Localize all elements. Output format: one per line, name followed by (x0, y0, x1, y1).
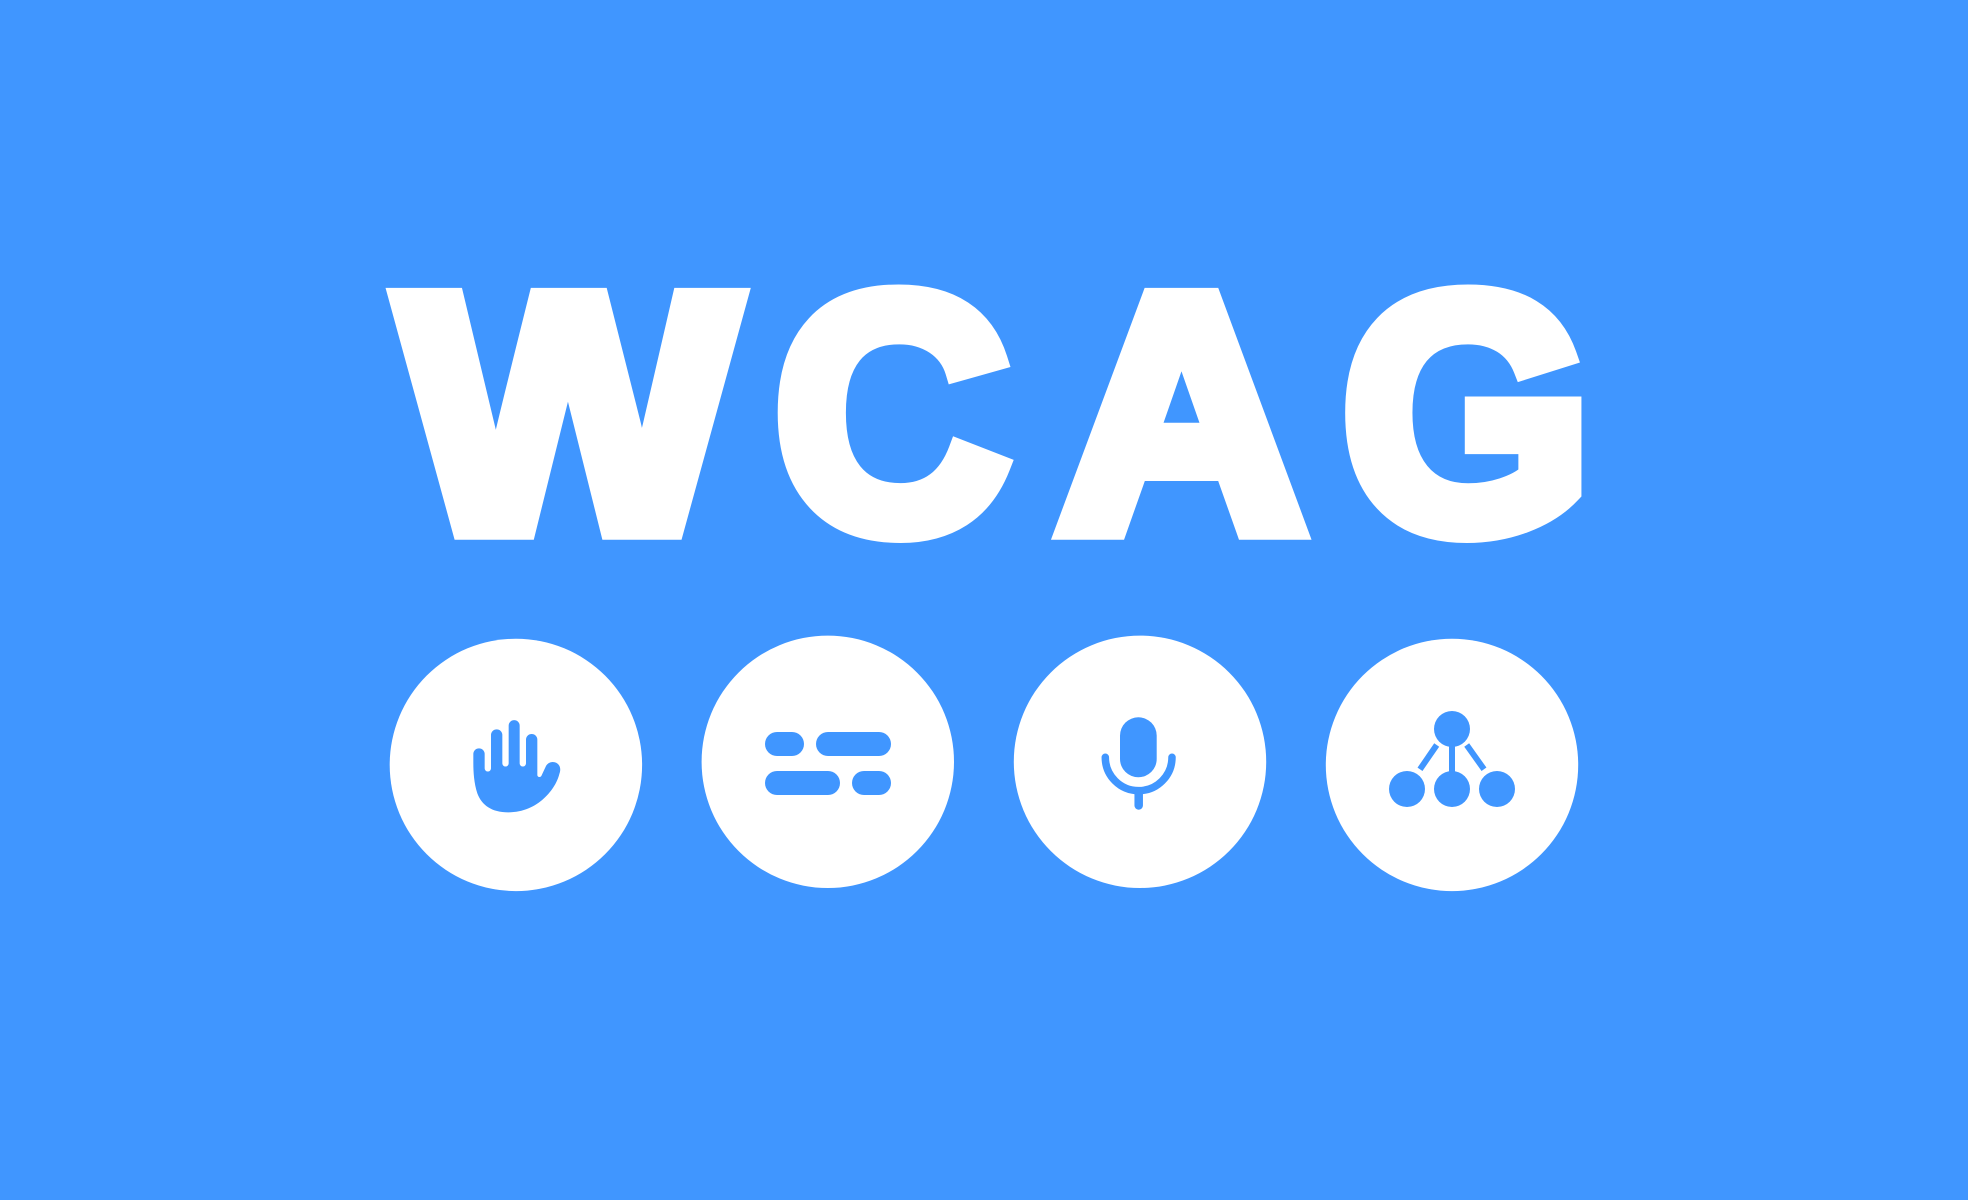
title: WCAG (400, 226, 1591, 600)
icon: text pills in circle (702, 636, 954, 888)
icon: hand in circle (390, 639, 642, 891)
icon: microphone in circle (1014, 636, 1266, 888)
letter W: W (400, 228, 739, 600)
letter C: C (775, 226, 1009, 600)
letter G: G (1343, 227, 1591, 600)
letter A: A (1058, 228, 1305, 600)
icon: hierarchy nodes in circle (1326, 639, 1578, 891)
